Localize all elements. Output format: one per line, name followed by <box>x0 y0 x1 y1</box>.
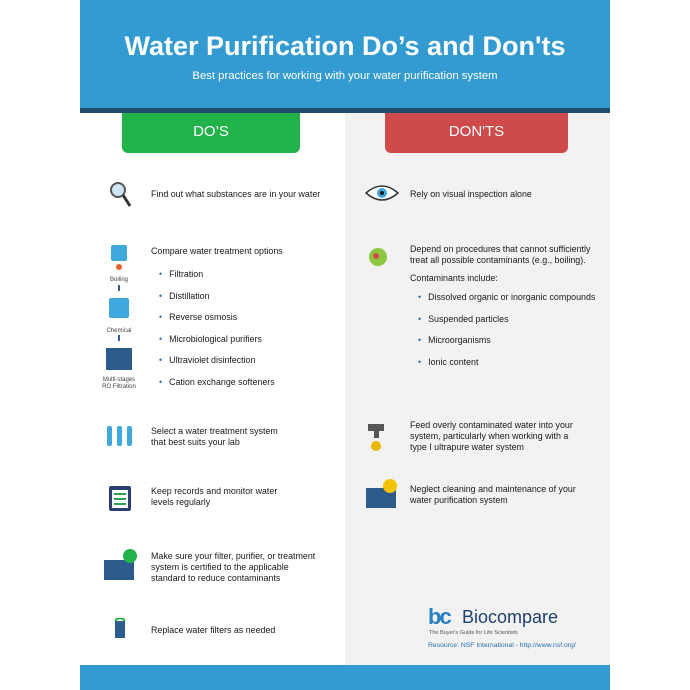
dont 3 text: Feed overly contaminated water into your <box>410 420 573 430</box>
icon: treatment stages: Boiling <box>110 277 128 283</box>
right column background <box>345 113 610 665</box>
icon: dirty filter <box>366 479 397 508</box>
do's banner <box>122 113 300 153</box>
icon: clipboard <box>109 486 131 511</box>
dont 2 text and list: Suspended particles <box>428 314 509 324</box>
dont 4 text: Neglect cleaning and maintenance of your <box>410 484 576 494</box>
do 5 text: standard to reduce contaminants <box>151 573 280 583</box>
dont 2 text and list: Contaminants include: <box>410 273 498 283</box>
do 2 text and list: Reverse osmosis <box>169 312 237 322</box>
do 3 text: Select a water treatment system <box>151 426 278 436</box>
icon: filter replacement <box>114 618 126 638</box>
do 2 text and list: Compare water treatment options <box>151 246 283 256</box>
icon: magnifier <box>110 182 132 207</box>
do 2 text and list: Cation exchange softeners <box>169 376 275 386</box>
logo: Biocompare: The Buyer's Guide for Life Scientists <box>429 630 518 636</box>
dont 1 text: Rely on visual inspection alone <box>410 189 532 199</box>
dont 2 text and list: treat all possible contaminants (e.g., boiling). <box>410 255 586 265</box>
do 3 text <box>151 426 278 447</box>
icon: treatment stages <box>102 245 136 390</box>
dont 3 text: type I ultrapure water system <box>410 442 524 452</box>
icon: test tubes <box>107 426 132 446</box>
dont 4 text: water purification system <box>410 495 508 505</box>
icon: certified filter <box>104 549 137 580</box>
dont 2 text and list: Dissolved organic or inorganic compounds <box>428 292 595 302</box>
don'ts banner <box>385 113 568 153</box>
icon: treatment stages: Multi-stages <box>103 377 135 383</box>
do 2 text and list: Microbiological purifiers <box>169 334 262 344</box>
resource credit: Resource: NSF International - http://www.nsf.org/ <box>428 642 576 649</box>
dont 2 text and list <box>410 244 595 366</box>
do 2 text and list: Filtration <box>169 269 203 279</box>
do 5 text <box>151 551 316 583</box>
do 4 text: Keep records and monitor water <box>151 486 277 496</box>
do 5 text: Make sure your filter, purifier, or treatment <box>151 551 315 561</box>
icon: germ <box>369 248 387 266</box>
dont 2 text and list: Ionic content <box>428 356 478 366</box>
dont 4 text <box>410 484 576 505</box>
dont 2 text and list: Depend on procedures that cannot sufficiently <box>410 244 590 254</box>
footer bar <box>80 665 610 690</box>
logo: Biocompare <box>428 604 558 636</box>
header <box>80 0 610 113</box>
do 6 text: Replace water filters as needed <box>151 625 275 635</box>
subtitle: Best practices for working with your water purification system <box>192 70 498 82</box>
icon: tap <box>368 424 384 451</box>
do 4 text <box>151 486 278 507</box>
title: Water Purification Do’s and Don'ts <box>125 31 565 61</box>
dont 3 text: system, particularly when working with a <box>410 431 568 441</box>
do 2 text and list <box>151 246 283 387</box>
do 2 text and list: Distillation <box>169 290 210 300</box>
icon: treatment stages: RO Filtration <box>102 384 136 390</box>
do 4 text: levels regularly <box>151 497 210 507</box>
logo: Biocompare: Biocompare <box>462 607 558 627</box>
icon: treatment stages: Chemical <box>106 328 132 334</box>
do 2 text and list: Ultraviolet disinfection <box>169 355 255 365</box>
icon: eye <box>365 185 399 201</box>
logo: Biocompare: bc <box>428 604 450 629</box>
dont 2 text and list: Microorganisms <box>428 335 491 345</box>
do's banner: DO’S <box>193 123 229 140</box>
dont 3 text <box>410 420 573 452</box>
do 1 text: Find out what substances are in your water <box>151 189 320 199</box>
do 5 text: system is certified to the applicable <box>151 562 289 572</box>
do 3 text: that best suits your lab <box>151 437 240 447</box>
don'ts banner: DON'TS <box>449 123 504 140</box>
